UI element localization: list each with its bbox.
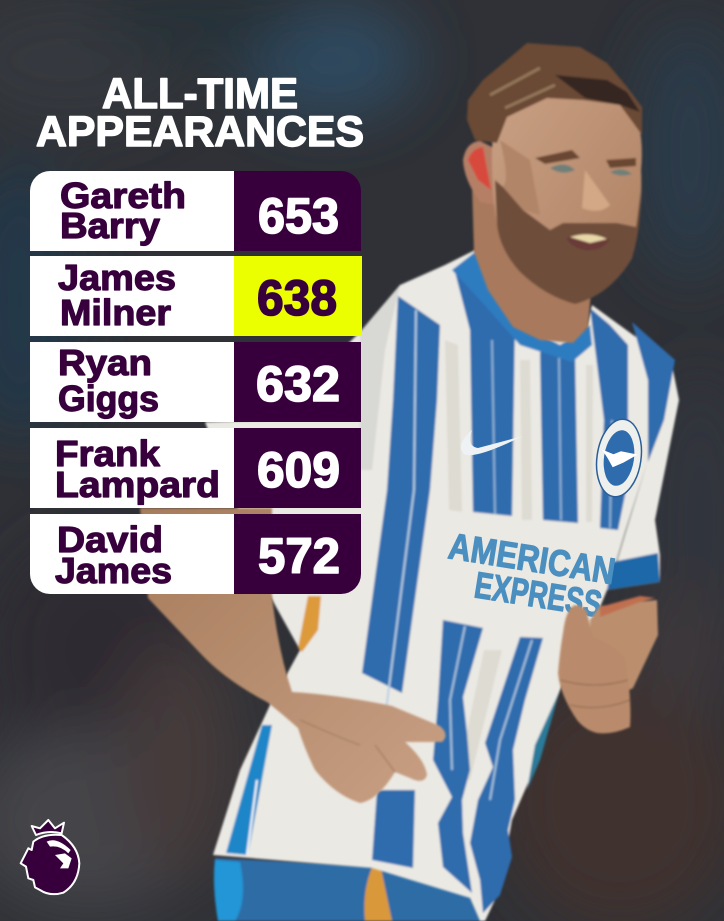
title: ALL-TIME xyxy=(102,70,298,118)
title: APPEARANCES xyxy=(36,108,364,156)
row: Ryan Giggs: Ryan xyxy=(58,342,152,383)
nike swoosh xyxy=(461,430,523,455)
brows xyxy=(535,150,636,168)
beard xyxy=(495,180,640,304)
row: James Milner (highlighted): Milner xyxy=(60,292,171,333)
row: Frank Lampard: 609 xyxy=(257,442,340,498)
row: James Milner (highlighted) xyxy=(30,256,362,336)
sleeve shade xyxy=(360,285,400,470)
row: James Milner (highlighted): 638 xyxy=(257,270,337,326)
neck xyxy=(472,185,592,343)
collar yoke xyxy=(452,252,592,362)
row: David James: 572 xyxy=(258,528,340,584)
row: Ryan Giggs: 632 xyxy=(256,356,340,412)
sponsor: EXPRESS xyxy=(472,564,605,625)
lower pinstripes xyxy=(450,626,532,800)
row: Gareth Barry: 653 xyxy=(258,188,339,244)
row: Frank Lampard: Lampard xyxy=(55,464,220,505)
player photo illustration xyxy=(140,43,679,921)
club crest xyxy=(592,416,646,500)
row: David James: James xyxy=(55,550,172,591)
cuff xyxy=(607,553,660,590)
row: Gareth Barry: Barry xyxy=(60,205,160,246)
hair xyxy=(467,43,642,143)
icon: Premier League lion logo xyxy=(21,820,79,894)
pinstripes xyxy=(376,310,416,790)
row: Ryan Giggs: Giggs xyxy=(58,378,159,419)
row: James Milner (highlighted): James xyxy=(58,257,176,298)
row: David James xyxy=(30,514,361,594)
mouth xyxy=(566,234,610,250)
title xyxy=(36,70,364,156)
row: David James: David xyxy=(57,519,163,560)
head xyxy=(463,43,642,343)
sponsor: AMERICAN xyxy=(446,525,618,592)
eyes xyxy=(550,164,632,176)
row: Frank Lampard: Frank xyxy=(55,433,161,474)
row: Frank Lampard xyxy=(30,428,361,508)
row: Ryan Giggs xyxy=(30,342,361,422)
row: Gareth Barry xyxy=(30,171,361,251)
orange side detail xyxy=(298,596,321,652)
beige fabric bands xyxy=(445,340,593,780)
face xyxy=(492,94,642,303)
cheek shadow xyxy=(500,140,540,215)
right arm and hand xyxy=(558,596,658,733)
table: all-time appearances xyxy=(30,171,362,594)
blue stripes lower xyxy=(433,620,483,893)
side hem stripe xyxy=(226,725,272,855)
ear xyxy=(463,141,498,205)
shorts xyxy=(214,858,482,921)
blue stripes upper xyxy=(362,296,440,693)
jersey xyxy=(205,250,679,921)
nose highlight xyxy=(582,170,610,211)
row: Gareth Barry: Gareth xyxy=(60,175,186,216)
left arm and hand xyxy=(140,508,446,803)
sponsor xyxy=(446,525,618,625)
